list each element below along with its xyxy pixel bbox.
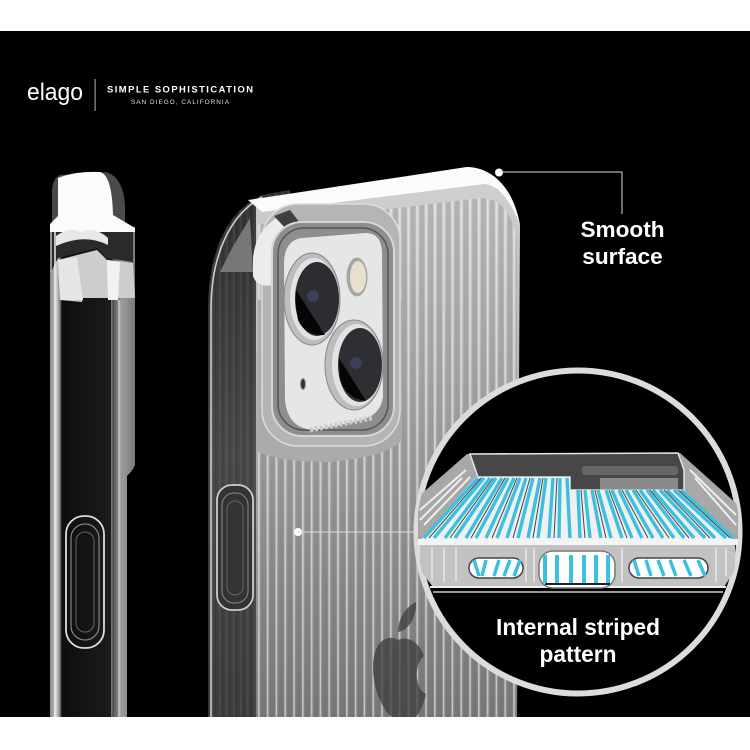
main phone case back bbox=[208, 167, 520, 717]
case floor bbox=[420, 477, 734, 541]
white top edge bbox=[248, 167, 520, 225]
lower plate grill bbox=[310, 418, 372, 430]
camera cutout bbox=[582, 466, 678, 475]
bump shoulder bbox=[253, 212, 310, 286]
side wall bbox=[208, 190, 290, 717]
callout: smooth surface bbox=[495, 168, 665, 269]
flash bbox=[346, 258, 368, 296]
blue stripes bbox=[424, 478, 733, 538]
center port bbox=[539, 551, 615, 588]
side view of phone case bbox=[50, 172, 135, 717]
magnified circle: pattern bbox=[540, 641, 616, 667]
location: SAN DIEGO, CALIFORNIA bbox=[131, 99, 230, 106]
callout: internal pattern pointer bbox=[294, 528, 416, 536]
right port bbox=[629, 558, 708, 578]
clear camera bump bbox=[262, 204, 400, 446]
case interior wall bbox=[470, 453, 684, 490]
left port bbox=[469, 558, 523, 578]
camera module bbox=[253, 204, 400, 446]
side body bbox=[50, 225, 135, 717]
scalloped area under the camera bump bbox=[258, 300, 402, 462]
circle label: Internal striped bbox=[496, 614, 660, 640]
cap flanks bbox=[52, 172, 125, 225]
left corner streaks bbox=[420, 470, 736, 525]
wall edge highlight bbox=[211, 197, 262, 717]
case side floors bbox=[418, 453, 738, 541]
cap inner arch bbox=[52, 232, 133, 270]
magnified circle bbox=[416, 370, 740, 694]
faceted camera reflection bbox=[58, 250, 135, 302]
header divider bbox=[94, 79, 96, 111]
white front lip bbox=[418, 539, 738, 545]
faceted reflection on wall bbox=[220, 218, 253, 272]
label: Smooth bbox=[580, 217, 665, 242]
pointer dot and line bbox=[495, 168, 503, 176]
white top cap bbox=[50, 172, 135, 232]
internal stripes bbox=[258, 198, 517, 717]
inner bump ring bbox=[272, 222, 394, 436]
side button bbox=[66, 516, 104, 648]
front wall of case bbox=[420, 545, 735, 587]
back surface bbox=[256, 167, 520, 717]
circle ring bbox=[416, 370, 740, 694]
camera plate bbox=[284, 233, 383, 430]
top lens bbox=[284, 253, 340, 345]
slogan: SIMPLE SOPHISTICATION bbox=[107, 84, 253, 94]
bottom lens bbox=[325, 320, 383, 410]
elago logo: elago bbox=[27, 79, 83, 106]
dark stripe shadows bbox=[429, 478, 730, 538]
apple logo bbox=[373, 602, 426, 717]
callout: smooth surface: surface bbox=[582, 244, 663, 269]
brand header bbox=[27, 79, 253, 111]
front wall ribs bbox=[432, 548, 726, 582]
right edge lines bbox=[118, 300, 120, 717]
left edge highlight bbox=[54, 232, 56, 717]
wall button bbox=[217, 485, 253, 610]
microphone bbox=[300, 378, 306, 390]
